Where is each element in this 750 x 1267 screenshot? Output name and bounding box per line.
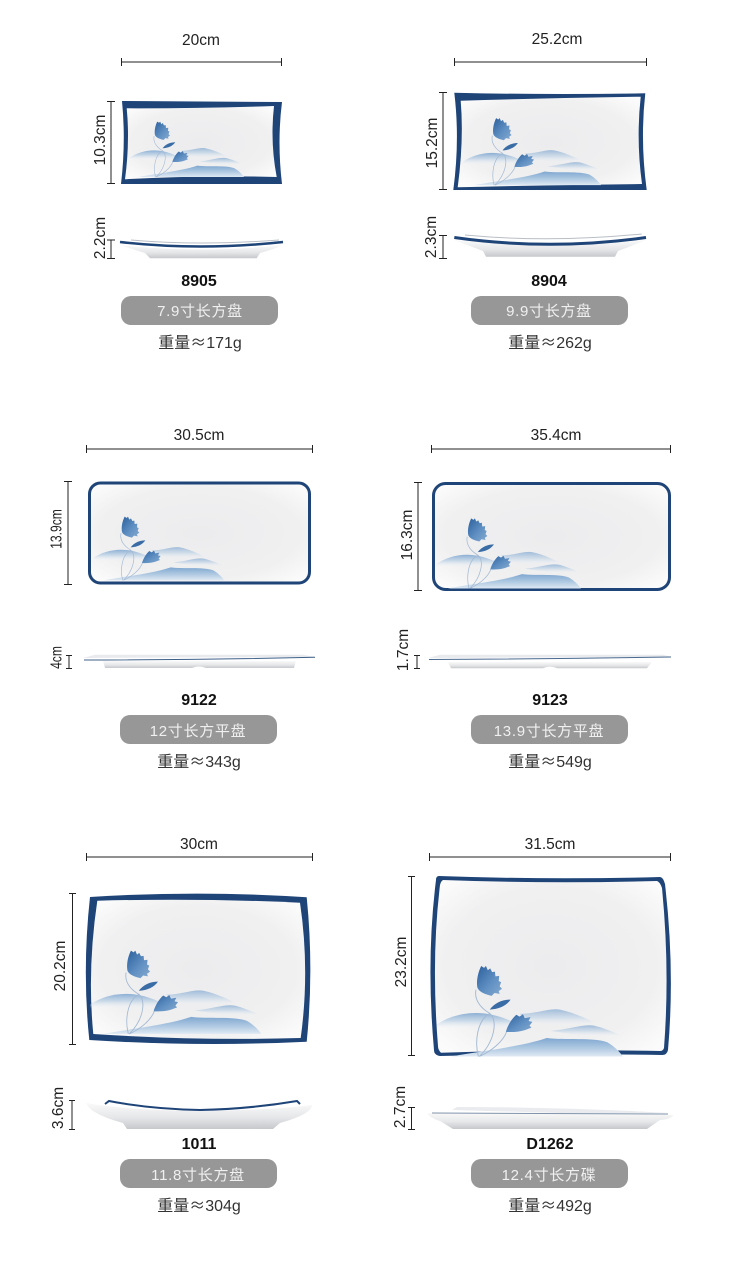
height dimension 23.2cm xyxy=(393,876,415,1056)
plate side view xyxy=(83,655,315,668)
plate top view xyxy=(86,894,310,1044)
plate side view xyxy=(428,655,672,668)
weight: 重量≈171g xyxy=(158,329,242,353)
model number: 9123 xyxy=(532,692,568,709)
product panel: D1262 xyxy=(392,836,673,1216)
plate top view xyxy=(434,484,670,590)
size pill xyxy=(120,715,277,744)
height dimension 16.3cm: 16.3cm xyxy=(399,510,416,560)
plate side view xyxy=(120,240,283,258)
height dimension 15.2cm: 15.2cm xyxy=(424,118,441,168)
side height dimension 3.6cm xyxy=(50,1087,75,1130)
size pill: 12.4寸长方碟 xyxy=(502,1167,596,1184)
weight: 重量≈304g xyxy=(157,1192,241,1216)
width dimension 20cm: 20cm xyxy=(182,32,220,49)
size pill: 9.9寸长方盘 xyxy=(506,302,592,320)
height dimension 20.2cm xyxy=(52,894,76,1044)
width dimension 35.4cm: 35.4cm xyxy=(531,427,581,444)
plate side view xyxy=(454,234,646,257)
width dimension 25.2cm xyxy=(454,31,646,66)
plate top view xyxy=(121,101,282,184)
width dimension 30cm: 30cm xyxy=(180,836,218,853)
height dimension 10.3cm: 10.3cm xyxy=(92,115,109,165)
weight: 重量≈262g xyxy=(508,329,592,353)
size pill: 13.9寸长方平盘 xyxy=(494,722,604,740)
size pill xyxy=(471,1159,628,1188)
plate side view xyxy=(86,1101,312,1129)
plate top view xyxy=(90,483,310,583)
side height dimension 4cm: 4cm xyxy=(47,646,65,669)
width dimension 30cm xyxy=(86,836,312,861)
height dimension 13.9cm: 13.9cm xyxy=(47,509,65,549)
size pill xyxy=(471,296,628,325)
size pill xyxy=(471,715,628,744)
size pill xyxy=(121,296,278,325)
weight: 重量≈492g xyxy=(508,1192,592,1216)
width dimension 30.5cm: 30.5cm xyxy=(174,427,224,444)
side height dimension 3.6cm: 3.6cm xyxy=(50,1087,67,1129)
product panel: 9122 xyxy=(47,427,315,772)
product panel: 9123 xyxy=(395,427,672,772)
model number: D1262 xyxy=(526,1136,574,1153)
plate top view xyxy=(430,876,671,1056)
side height dimension 1.7cm: 1.7cm xyxy=(395,629,412,671)
size pill: 7.9寸长方盘 xyxy=(157,302,243,320)
height dimension 15.2cm xyxy=(424,92,447,190)
model number: 1011 xyxy=(182,1136,216,1153)
product panel: 8905 xyxy=(92,32,283,353)
width dimension 20cm xyxy=(122,32,282,66)
size pill: 11.8寸长方盘 xyxy=(151,1166,245,1184)
size pill: 12寸长方平盘 xyxy=(150,722,246,740)
width dimension 25.2cm: 25.2cm xyxy=(532,31,582,48)
width dimension 35.4cm xyxy=(432,427,670,453)
side height dimension 2.2cm: 2.2cm xyxy=(92,217,109,259)
model number: 9122 xyxy=(181,692,217,709)
plate side view xyxy=(427,1107,673,1129)
width dimension 31.5cm xyxy=(430,836,670,861)
height dimension 16.3cm xyxy=(399,482,422,590)
side height dimension 2.7cm: 2.7cm xyxy=(392,1086,409,1128)
width dimension 31.5cm: 31.5cm xyxy=(525,836,575,853)
height dimension 23.2cm: 23.2cm xyxy=(393,937,410,987)
height dimension 13.9cm xyxy=(47,482,72,584)
product panel: 8904 xyxy=(423,31,647,353)
side height dimension 1.7cm xyxy=(395,629,420,671)
weight: 重量≈343g xyxy=(157,748,241,772)
plate top view xyxy=(453,93,647,190)
weight: 重量≈549g xyxy=(508,748,592,772)
height dimension 20.2cm: 20.2cm xyxy=(52,941,69,991)
size pill xyxy=(120,1159,277,1188)
side height dimension 2.3cm: 2.3cm xyxy=(423,216,440,258)
model number: 8905 xyxy=(181,273,217,290)
model number: 8904 xyxy=(531,273,567,290)
height dimension 10.3cm xyxy=(92,102,115,184)
width dimension 30.5cm xyxy=(86,427,312,453)
product panel: 1011 xyxy=(50,836,312,1216)
